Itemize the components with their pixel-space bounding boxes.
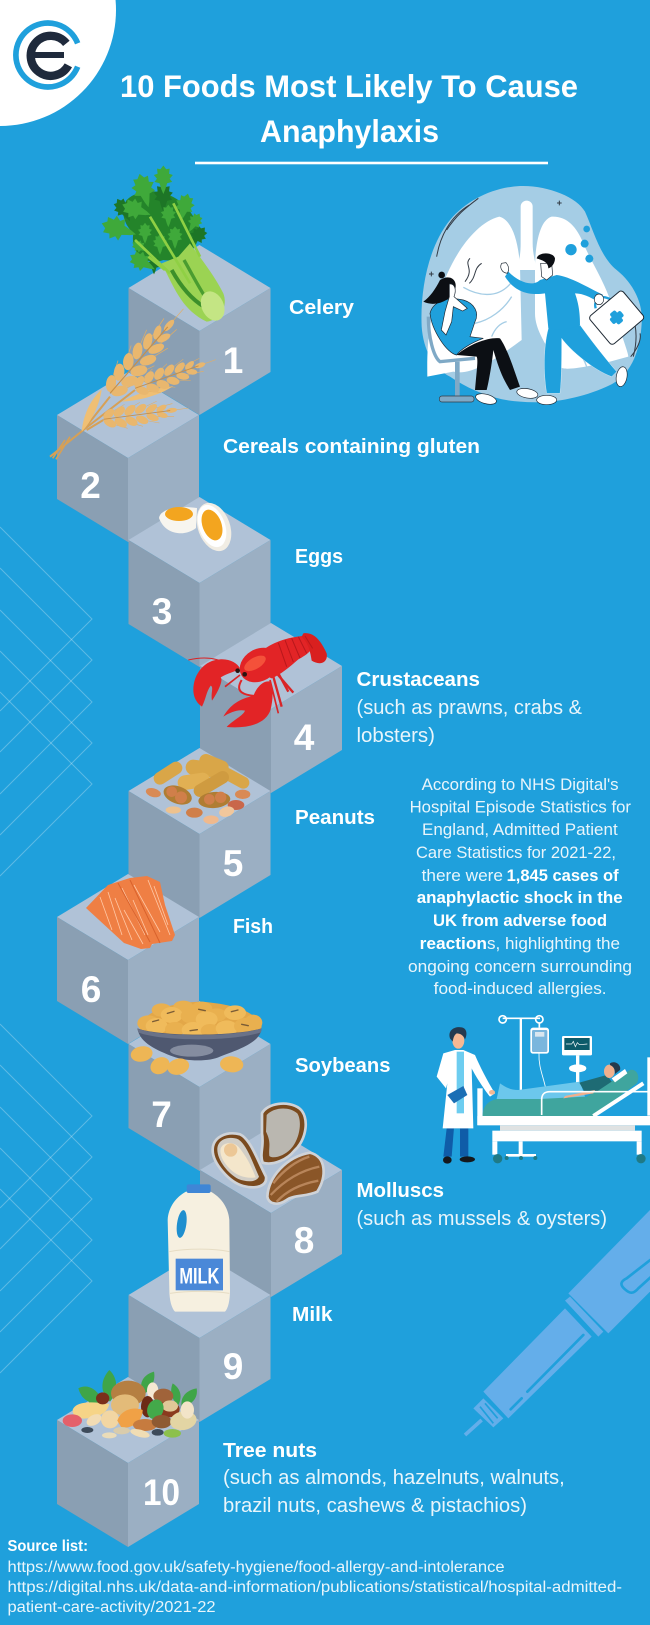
title underline (195, 162, 548, 164)
paragraph: NHS statistics: ongoing concern surrounding (408, 957, 632, 976)
paragraph: NHS statistics: reaction (420, 934, 487, 953)
paragraph: NHS statistics: Care Statistics for 2021-22, (416, 843, 616, 862)
step 6 cube (57, 874, 199, 1044)
step 7 cube: 7 (151, 1094, 172, 1135)
illustration: doctor helping patient, lungs (421, 186, 645, 406)
label: crustaceans (356, 669, 583, 747)
step 10 cube: 10 (143, 1472, 180, 1513)
food: oysters (213, 1104, 324, 1204)
label: crustaceans: lobsters) (356, 725, 435, 747)
label: cereals: Cereals containing gluten (223, 436, 480, 458)
source list (8, 1538, 622, 1616)
logo (16, 23, 78, 87)
source list: patient-care-activity/2021-22 (8, 1599, 216, 1616)
paragraph: NHS statistics: food-induced allergies. (434, 979, 607, 998)
step 5 cube: 5 (223, 843, 243, 884)
food: tree nuts (63, 1370, 198, 1439)
food: wheat (50, 298, 220, 459)
label: fish: Fish (233, 916, 273, 938)
label: milk: Milk (292, 1304, 333, 1326)
step 6 cube: 6 (81, 969, 101, 1010)
paragraph: NHS statistics: 1,845 cases of (507, 866, 619, 885)
step 1 cube: 1 (223, 340, 243, 381)
label: tree nuts: (such as almonds, hazelnuts, walnuts, (223, 1467, 565, 1489)
step 4 cube (200, 623, 342, 793)
food: milk bottle: MILK (179, 1263, 219, 1288)
step 1 cube (128, 245, 270, 415)
label: celery: Celery (289, 297, 355, 319)
step 8 cube: 8 (294, 1220, 314, 1261)
decorative diamond lines lower (0, 1024, 92, 1373)
paragraph: NHS statistics: anaphylactic shock in the (417, 888, 623, 907)
food: milk bottle (168, 1184, 230, 1312)
label: tree nuts: brazil nuts, cashews & pistachios) (223, 1495, 527, 1517)
step 9 cube: 9 (223, 1346, 243, 1387)
food: eggs (159, 498, 238, 556)
food: salmon (86, 876, 175, 949)
step 9 cube (128, 1252, 270, 1422)
paragraph: NHS statistics: UK from adverse food (433, 911, 607, 930)
food: celery (98, 165, 229, 325)
step 3 cube (128, 497, 270, 667)
paragraph: NHS statistics: s, highlighting the (487, 934, 620, 953)
decorative diamond lines upper (0, 527, 92, 876)
paragraph: NHS statistics: England, Admitted Patient (422, 820, 618, 839)
step 10 cube (57, 1377, 199, 1547)
paragraph: NHS statistics: Hospital Episode Statistics for (410, 798, 631, 817)
source list: https://digital.nhs.uk/data-and-information/publications/statistical/hospital-admitted- (8, 1579, 622, 1596)
paragraph: NHS statistics: there were (422, 866, 503, 885)
food: peanuts (145, 761, 250, 824)
step 5 cube (128, 748, 270, 918)
label: molluscs (356, 1180, 607, 1230)
step 7 cube (128, 1001, 270, 1171)
illustration: adrenaline auto-injector pen (465, 1210, 650, 1435)
label: soybeans: Soybeans (295, 1055, 390, 1077)
label: crustaceans: Crustaceans (356, 669, 480, 691)
title: 10 Foods Most Likely To Cause (120, 68, 578, 104)
step 8 cube (200, 1127, 342, 1297)
label: eggs: Eggs (295, 546, 343, 568)
label: crustaceans: (such as prawns, crabs & (356, 697, 583, 719)
step 4 cube: 4 (294, 717, 315, 758)
title: Anaphylaxis (260, 113, 439, 149)
food: soybeans in bowl (130, 1001, 262, 1078)
label: peanuts: Peanuts (295, 807, 375, 829)
source list: https://www.food.gov.uk/safety-hygiene/food-allergy-and-intolerance (8, 1559, 505, 1576)
food: lobster (188, 633, 327, 727)
source list: Source list: (8, 1538, 88, 1555)
label: tree nuts: Tree nuts (223, 1440, 317, 1462)
step 3 cube: 3 (152, 591, 172, 632)
label: molluscs: Molluscs (356, 1180, 444, 1202)
logo corner (0, 0, 116, 126)
label: tree nuts (223, 1440, 565, 1517)
step 2 cube: 2 (80, 465, 101, 506)
paragraph: NHS statistics (408, 775, 632, 998)
label: molluscs: (such as mussels & oysters) (356, 1208, 607, 1230)
title (120, 68, 578, 149)
paragraph: NHS statistics: According to NHS Digital's (422, 775, 619, 794)
illustration: hospital bed with doctor (437, 1016, 650, 1164)
step 2 cube (57, 372, 199, 542)
